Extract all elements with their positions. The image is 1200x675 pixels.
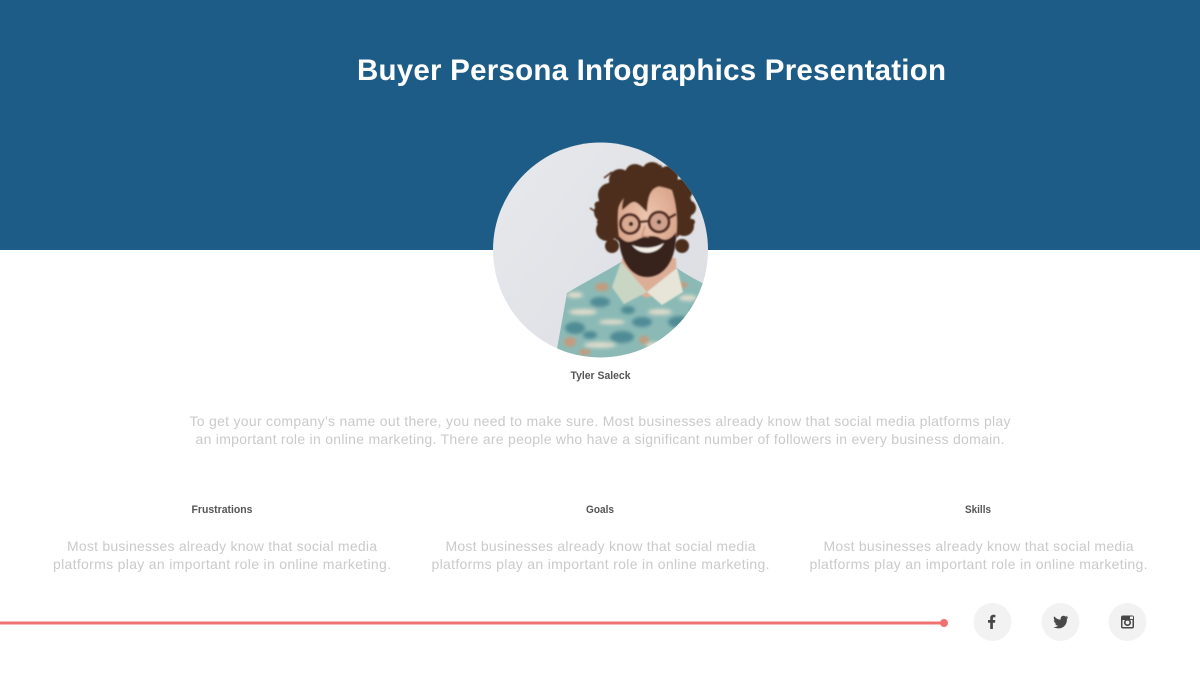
header band bbox=[0, 0, 1200, 250]
column: Goals: Most businesses already know that social media bbox=[446, 538, 756, 554]
column: Frustrations: platforms play an important role in online marketing. bbox=[53, 556, 391, 572]
column: Skills: Skills bbox=[965, 504, 991, 516]
glasses bbox=[620, 214, 640, 234]
column: Goals bbox=[432, 504, 770, 572]
beard bbox=[619, 232, 676, 277]
title: Buyer Persona Infographics Presentation bbox=[357, 54, 946, 87]
icon: twitter bbox=[1042, 603, 1080, 641]
shirt bbox=[555, 262, 712, 360]
nose shadow bbox=[642, 226, 649, 237]
portrait photo bbox=[490, 140, 712, 360]
face bbox=[618, 182, 677, 277]
smile bbox=[632, 243, 664, 253]
intro text: To get your company’s name out there, you need to make sure. Most businesses already know that social media platforms play bbox=[190, 413, 1010, 429]
collar and neck bbox=[612, 258, 683, 305]
column: Goals: platforms play an important role in online marketing. bbox=[432, 556, 770, 572]
name: Tyler Saleck bbox=[570, 370, 631, 382]
forelock bbox=[622, 182, 664, 212]
column: Skills: Most businesses already know that social media bbox=[824, 538, 1134, 554]
column: Frustrations: Frustrations bbox=[192, 504, 252, 516]
column: Frustrations bbox=[53, 504, 391, 572]
column: Goals: Goals bbox=[586, 504, 614, 516]
hair bbox=[590, 162, 696, 253]
column: Frustrations: Most businesses already know that social media bbox=[67, 538, 377, 554]
timeline line with dot bbox=[0, 619, 948, 627]
icon: facebook bbox=[974, 603, 1012, 641]
column: Skills: platforms play an important role in online marketing. bbox=[810, 556, 1148, 572]
icon: instagram bbox=[1108, 603, 1146, 641]
intro text: an important role in online marketing. There are people who have a significant number of followers in every business domain. bbox=[196, 431, 1004, 447]
intro text bbox=[190, 413, 1010, 447]
column: Skills bbox=[810, 504, 1148, 572]
